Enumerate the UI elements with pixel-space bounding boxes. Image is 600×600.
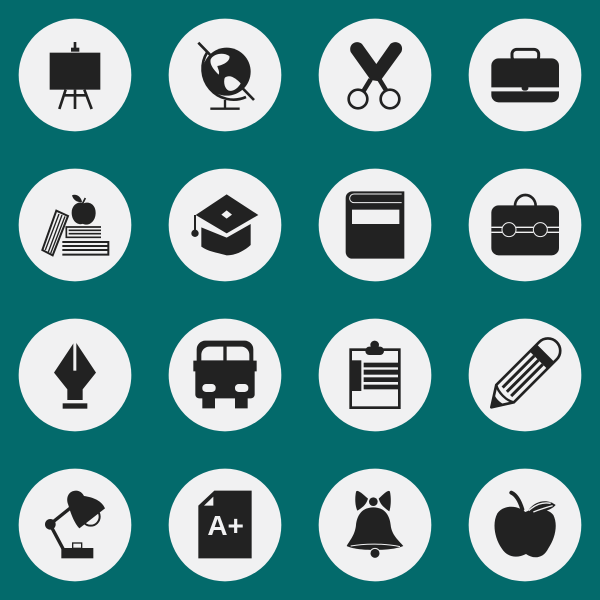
icon: bell — [319, 469, 431, 581]
panel: row 3 columns 1-2 — [19, 319, 281, 431]
icon: briefcase with straps — [469, 169, 581, 281]
icon: globe — [169, 19, 281, 131]
icon: bus — [169, 319, 281, 431]
panel: row 2 columns 1-2 — [19, 169, 281, 281]
icon: clipboard — [319, 319, 431, 431]
panel: row 1 columns 1-2 — [19, 19, 281, 131]
icon: briefcase with handle — [469, 19, 581, 131]
icon: easel — [19, 19, 131, 131]
panel: row 2 columns 3-4 — [319, 169, 581, 281]
icon: graded paper — [169, 469, 281, 581]
icon: book — [319, 169, 431, 281]
icon: scissors — [319, 19, 431, 131]
panel: row 3 columns 3-4 — [319, 319, 581, 431]
panel: row 1 columns 3-4 — [319, 19, 581, 131]
icon: graduation cap — [169, 169, 281, 281]
icon: pen nib — [19, 319, 131, 431]
grade text: A+ — [207, 510, 244, 541]
panel: row 4 columns 1-2 — [19, 469, 281, 581]
icon: desk lamp — [19, 469, 131, 581]
icon: apple — [469, 469, 581, 581]
icon: pencil — [469, 319, 581, 431]
icon: books and apple — [19, 169, 131, 281]
panel: row 4 columns 3-4 — [319, 469, 581, 581]
